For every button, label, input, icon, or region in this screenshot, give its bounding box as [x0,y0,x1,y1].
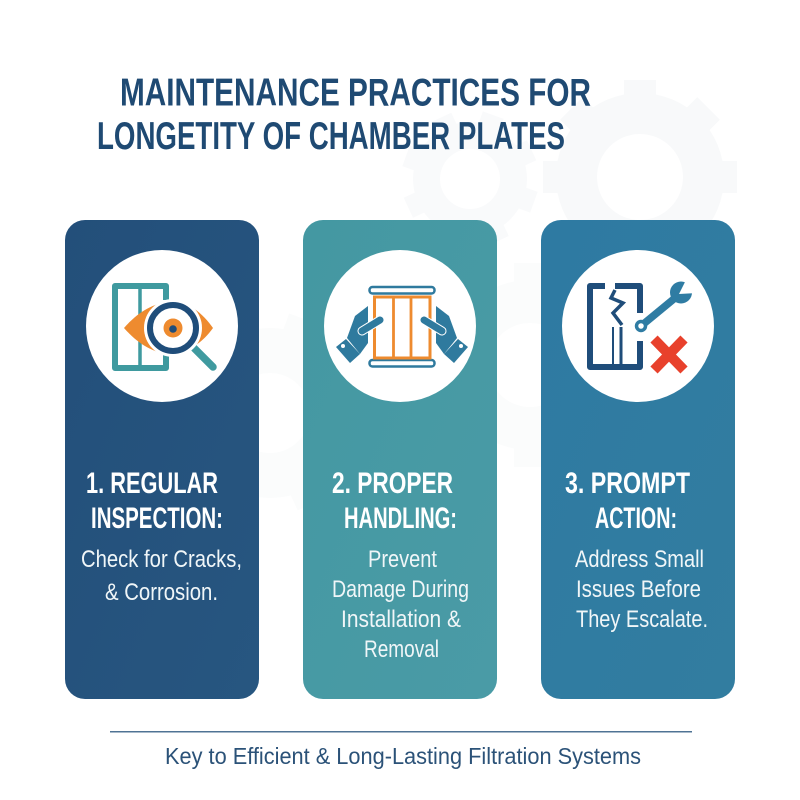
body text 2: Prevent [368,546,437,573]
panel: proper handling [303,220,497,699]
icon: plate under magnified eye [115,286,213,368]
heading 2: 2. PROPER [332,467,453,500]
heading 1 [86,467,223,535]
card background 1 [65,220,259,699]
body text 2: Removal [364,636,439,663]
heading 1: 1. REGULAR [86,467,218,500]
icon circle 3 [562,250,714,402]
body text 1: Check for Cracks, [81,546,242,573]
card background 3 [541,220,735,699]
heading 1: INSPECTION: [91,502,223,535]
body text 3: Address Small [575,546,704,573]
heading 2: HANDLING: [344,502,457,535]
heading 2 [332,467,457,535]
body text 2 [332,546,469,663]
body text 1 [81,546,242,606]
body text 1: & Corrosion. [105,579,218,606]
heading 3 [565,467,690,535]
title: LONGETITY OF CHAMBER PLATES [97,115,565,158]
footer tagline: Key to Efficient & Long-Lasting Filtration Systems [165,743,641,769]
body text 3: Issues Before [576,576,701,603]
icon: cracked plate, wrench and cross [590,280,697,370]
background gears [171,80,737,512]
heading 3: ACTION: [595,502,677,535]
title [97,72,591,158]
body text 2: Installation & [341,606,461,633]
heading 3: 3. PROMPT [565,467,690,500]
panel: regular inspection [65,220,259,699]
body text 2: Damage During [332,576,469,603]
card background 2 [303,220,497,699]
body text 3: They Escalate. [576,606,708,633]
panel: prompt action [541,220,735,699]
icon circle 2 [324,250,476,402]
icon circle 1 [86,250,238,402]
body text 3 [575,546,708,633]
title: MAINTENANCE PRACTICES FOR [120,72,591,114]
icon: hands holding plate [336,287,468,366]
